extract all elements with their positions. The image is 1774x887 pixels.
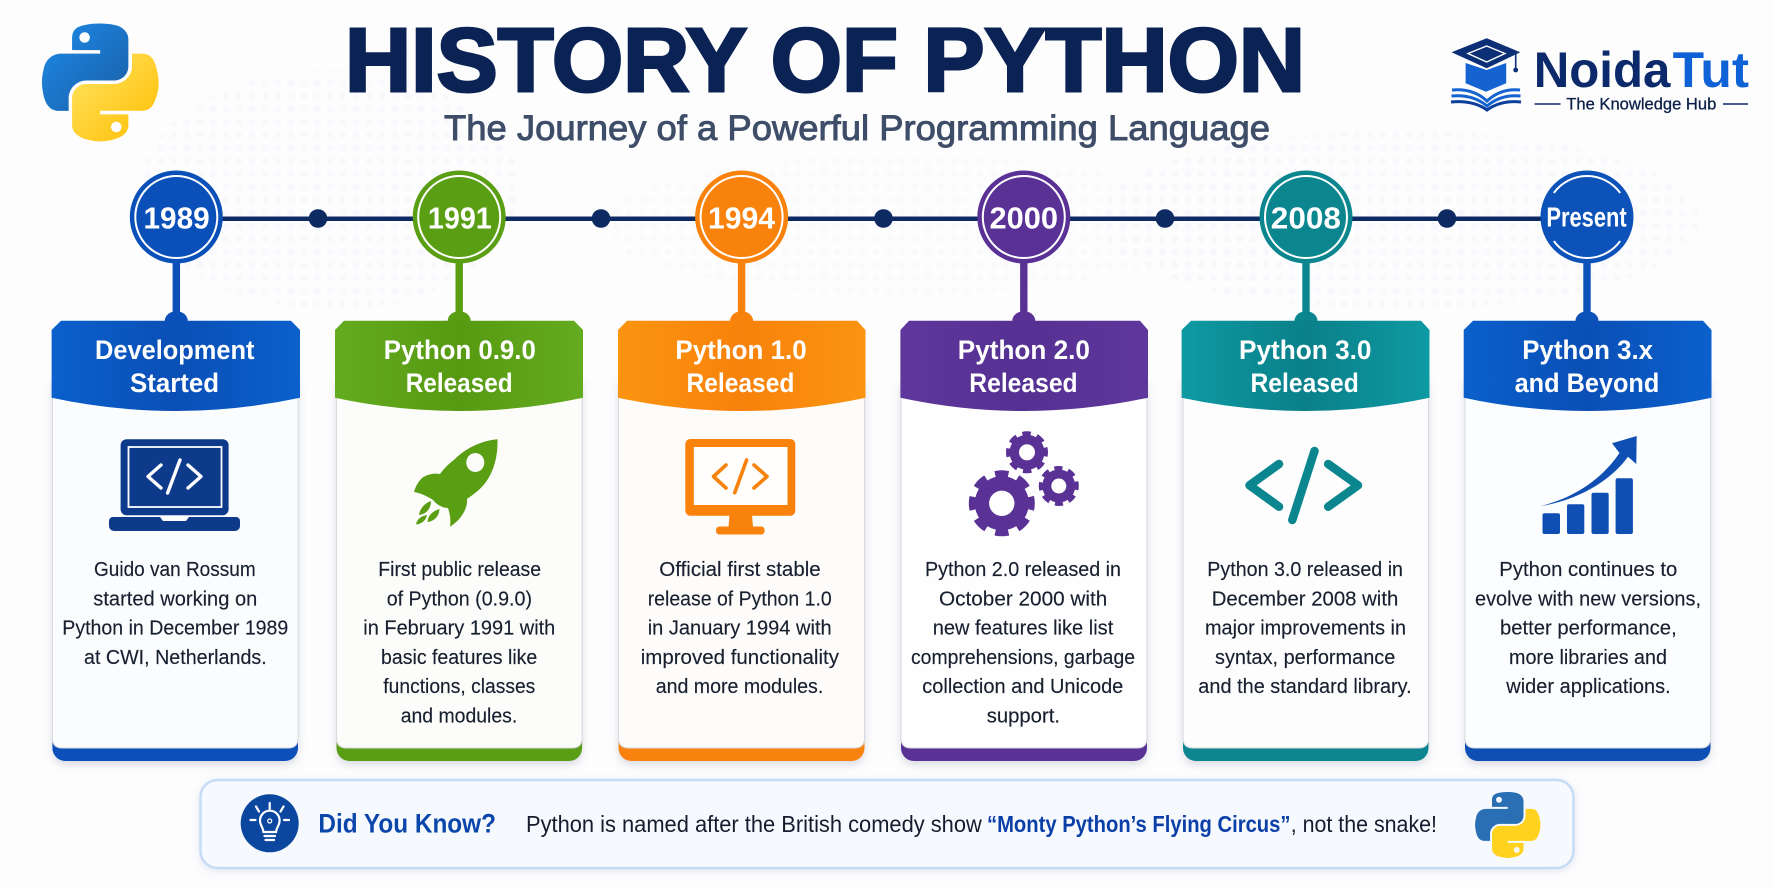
callout text: Python is named after the British comedy show	[526, 811, 983, 837]
card text: improved functionality	[641, 646, 840, 669]
card text: functions, classes	[383, 675, 535, 698]
card text: Python 2.0 released in	[925, 558, 1121, 581]
card header	[900, 321, 1148, 411]
card text: Guido van Rossum	[94, 558, 256, 581]
panel: 1994 python 1.0 released	[618, 170, 866, 761]
icon: laptop with code	[109, 439, 240, 531]
card body	[52, 380, 298, 761]
python logo small	[1475, 792, 1540, 858]
card heading	[958, 335, 1090, 398]
card text	[1475, 558, 1701, 698]
panel: 1989 development started	[52, 170, 300, 761]
card header	[1182, 321, 1430, 411]
card text: basic features like	[381, 646, 537, 669]
card text: Python continues to	[1499, 558, 1677, 581]
card header	[618, 321, 866, 411]
callout: did you know	[200, 780, 1574, 868]
card text: more libraries and	[1509, 646, 1667, 669]
card heading: and Beyond	[1515, 368, 1659, 398]
card text: evolve with new versions,	[1475, 587, 1701, 610]
icon: growth bar chart with arrow	[1541, 436, 1637, 534]
year marker present	[1540, 170, 1634, 321]
year marker 1994	[695, 170, 788, 321]
card body	[901, 380, 1147, 761]
year marker 2000: 2000	[990, 200, 1058, 235]
card heading: Started	[130, 368, 219, 398]
card heading: Released	[969, 368, 1078, 398]
card text: and the standard library.	[1198, 675, 1412, 698]
callout highlight: “Monty Python’s Flying Circus”	[987, 811, 1290, 837]
card text	[911, 558, 1135, 728]
card text: wider applications.	[1505, 675, 1671, 698]
year marker 2008	[1260, 170, 1352, 321]
icon: rocket	[414, 439, 498, 527]
card body	[618, 380, 864, 761]
card header	[335, 321, 583, 411]
card text: Python 3.0 released in	[1207, 558, 1403, 581]
card text: major improvements in	[1205, 617, 1406, 640]
panel: 2008 python 3.0 released	[1182, 170, 1430, 761]
card text: Python in December 1989	[62, 617, 288, 640]
card heading: Python 0.9.0	[384, 335, 536, 365]
icon: light bulb	[241, 794, 299, 852]
brand tagline: The Knowledge Hub	[1566, 94, 1716, 113]
year marker 1991	[413, 170, 506, 321]
card text: in January 1994 with	[648, 617, 832, 640]
card text: and more modules.	[656, 675, 823, 698]
card text: Official first stable	[659, 558, 821, 581]
card text: comprehensions, garbage	[911, 646, 1135, 669]
card heading	[384, 335, 536, 398]
year marker 2000	[977, 170, 1070, 321]
timeline line	[176, 209, 1587, 228]
callout box	[200, 780, 1574, 868]
python logo top left	[42, 24, 159, 141]
icon: gears	[972, 433, 1077, 533]
card text: First public release	[378, 558, 541, 581]
callout text end: , not the snake!	[1291, 811, 1437, 837]
card body	[1183, 380, 1428, 761]
card text: better performance,	[1500, 617, 1677, 640]
card heading	[1515, 335, 1659, 398]
card text: and modules.	[401, 704, 517, 728]
year marker 2008: 2008	[1271, 200, 1341, 235]
card text: at CWI, Netherlands.	[84, 646, 267, 669]
icon: code brackets	[1250, 451, 1358, 520]
callout heading: Did You Know?	[318, 809, 496, 839]
card heading: Released	[406, 368, 513, 398]
brand name accent: Tut	[1673, 42, 1749, 98]
card text: of Python (0.9.0)	[387, 587, 532, 610]
card body	[1465, 380, 1710, 761]
panel: present python 3.x and beyond	[1464, 170, 1712, 761]
card text: syntax, performance	[1215, 646, 1395, 669]
card text: collection and Unicode	[922, 675, 1123, 698]
brand name: Noida	[1534, 42, 1672, 98]
card heading: Released	[1250, 368, 1359, 398]
card text: new features like list	[933, 617, 1114, 640]
card heading	[675, 335, 807, 398]
card heading	[1239, 335, 1372, 398]
card text: release of Python 1.0	[648, 587, 832, 610]
card text	[363, 558, 555, 728]
card text: started working on	[93, 587, 257, 610]
card heading	[95, 335, 255, 398]
card heading: Python 3.x	[1522, 335, 1653, 365]
subtitle: The Journey of a Powerful Programming Language	[444, 109, 1270, 148]
card header	[1464, 321, 1712, 411]
card text: support.	[987, 704, 1060, 728]
year marker 1994: 1994	[708, 200, 776, 235]
card text	[641, 558, 840, 698]
faint dotted world map background	[140, 70, 1700, 310]
year marker 1989	[130, 170, 223, 321]
card body	[336, 380, 582, 761]
card text: in February 1991 with	[363, 617, 555, 640]
card heading: Development	[95, 335, 255, 365]
card heading: Released	[686, 368, 794, 398]
panel: 2000 python 2.0 released	[900, 170, 1148, 761]
icon: monitor with code	[685, 439, 795, 534]
year marker 1989: 1989	[144, 200, 210, 235]
NoidaTut brand logo	[1451, 38, 1749, 113]
card text	[62, 558, 288, 669]
year marker present: Present	[1546, 202, 1627, 233]
card text: October 2000 with	[939, 587, 1107, 610]
card heading: Python 1.0	[675, 335, 807, 365]
card heading: Python 2.0	[958, 335, 1090, 365]
icon: graduation cap on book	[1451, 38, 1521, 110]
card header	[52, 321, 300, 411]
card text	[1198, 558, 1412, 698]
card heading: Python 3.0	[1239, 335, 1372, 365]
card text: December 2008 with	[1212, 587, 1398, 610]
title: HISTORY OF PYTHON	[345, 11, 1305, 111]
panel: 1991 python 0.9.0 released	[335, 170, 583, 761]
year marker 1991: 1991	[428, 200, 492, 235]
